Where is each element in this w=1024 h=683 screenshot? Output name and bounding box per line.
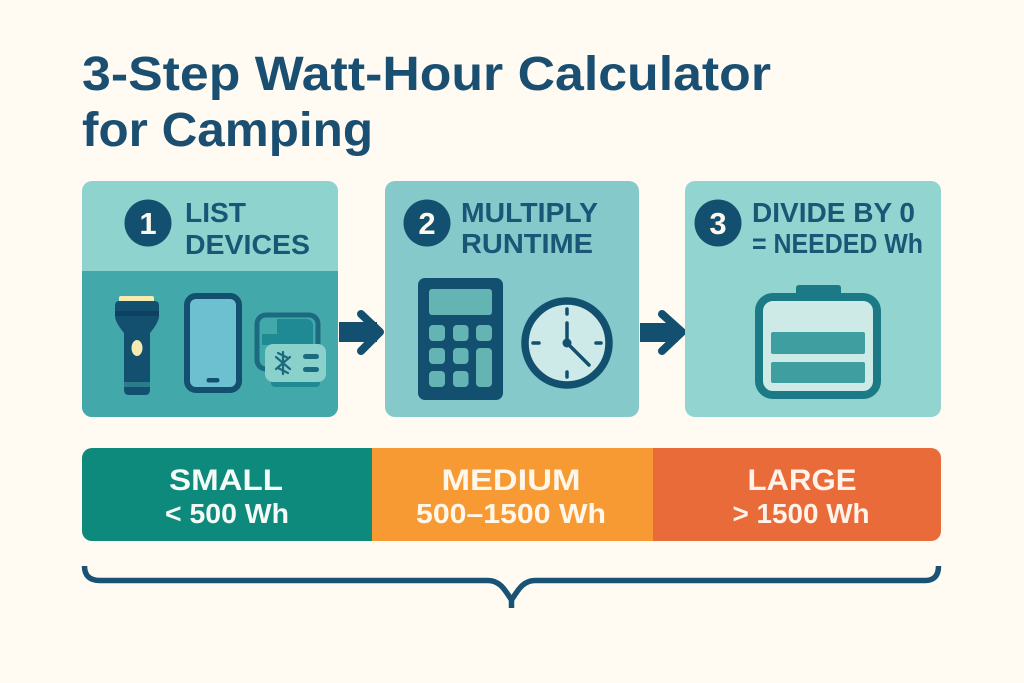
step 3 heading: = NEEDED Wh bbox=[752, 228, 923, 259]
step 2 number badge: 2 bbox=[418, 206, 436, 241]
step 1 heading: LIST bbox=[185, 197, 246, 228]
title: for Camping bbox=[82, 104, 373, 157]
step 3 number badge: 3 bbox=[709, 206, 727, 241]
segment: medium bbox=[372, 448, 653, 541]
icon: clock bbox=[525, 301, 609, 385]
title bbox=[82, 48, 771, 157]
title: 3-Step Watt-Hour Calculator bbox=[82, 48, 771, 101]
segment: medium: 500–1500 Wh bbox=[416, 498, 606, 529]
step 1 heading bbox=[185, 197, 310, 260]
step 1 number badge: 1 bbox=[139, 206, 157, 241]
step 3 heading: DIVIDE BY 0 bbox=[752, 197, 915, 228]
step 2 heading: MULTIPLY bbox=[461, 197, 598, 228]
brace bbox=[84, 566, 938, 608]
panel: step 1 list devices bbox=[82, 181, 338, 417]
step 3 number badge bbox=[694, 200, 742, 246]
segment: large bbox=[653, 448, 941, 541]
arrow: step 1 to step 2 bbox=[339, 314, 380, 351]
step 1 number badge bbox=[124, 200, 172, 246]
arrow: step 2 to step 3 bbox=[640, 314, 682, 351]
segment: medium: MEDIUM bbox=[442, 464, 580, 497]
segment: small: < 500 Wh bbox=[165, 498, 289, 529]
icon: battery bbox=[759, 285, 877, 395]
segment: small: SMALL bbox=[169, 464, 283, 497]
panel: step 2 multiply runtime bbox=[385, 181, 639, 417]
step 2 heading: RUNTIME bbox=[461, 228, 593, 259]
segment: large: > 1500 Wh bbox=[732, 498, 870, 529]
step 2 number badge bbox=[404, 200, 450, 246]
step 2 heading bbox=[461, 197, 598, 259]
size range bar bbox=[82, 448, 941, 541]
step 1 heading: DEVICES bbox=[185, 229, 310, 260]
icon: smartphone bbox=[187, 296, 239, 390]
panel: step 3 divide bbox=[685, 181, 941, 417]
step 3 heading bbox=[752, 197, 923, 259]
segment: large: LARGE bbox=[748, 464, 856, 497]
icon: bluetooth device bbox=[257, 315, 326, 387]
icon: flashlight bbox=[115, 296, 159, 395]
icon: calculator bbox=[418, 278, 503, 400]
segment: small bbox=[82, 448, 372, 541]
